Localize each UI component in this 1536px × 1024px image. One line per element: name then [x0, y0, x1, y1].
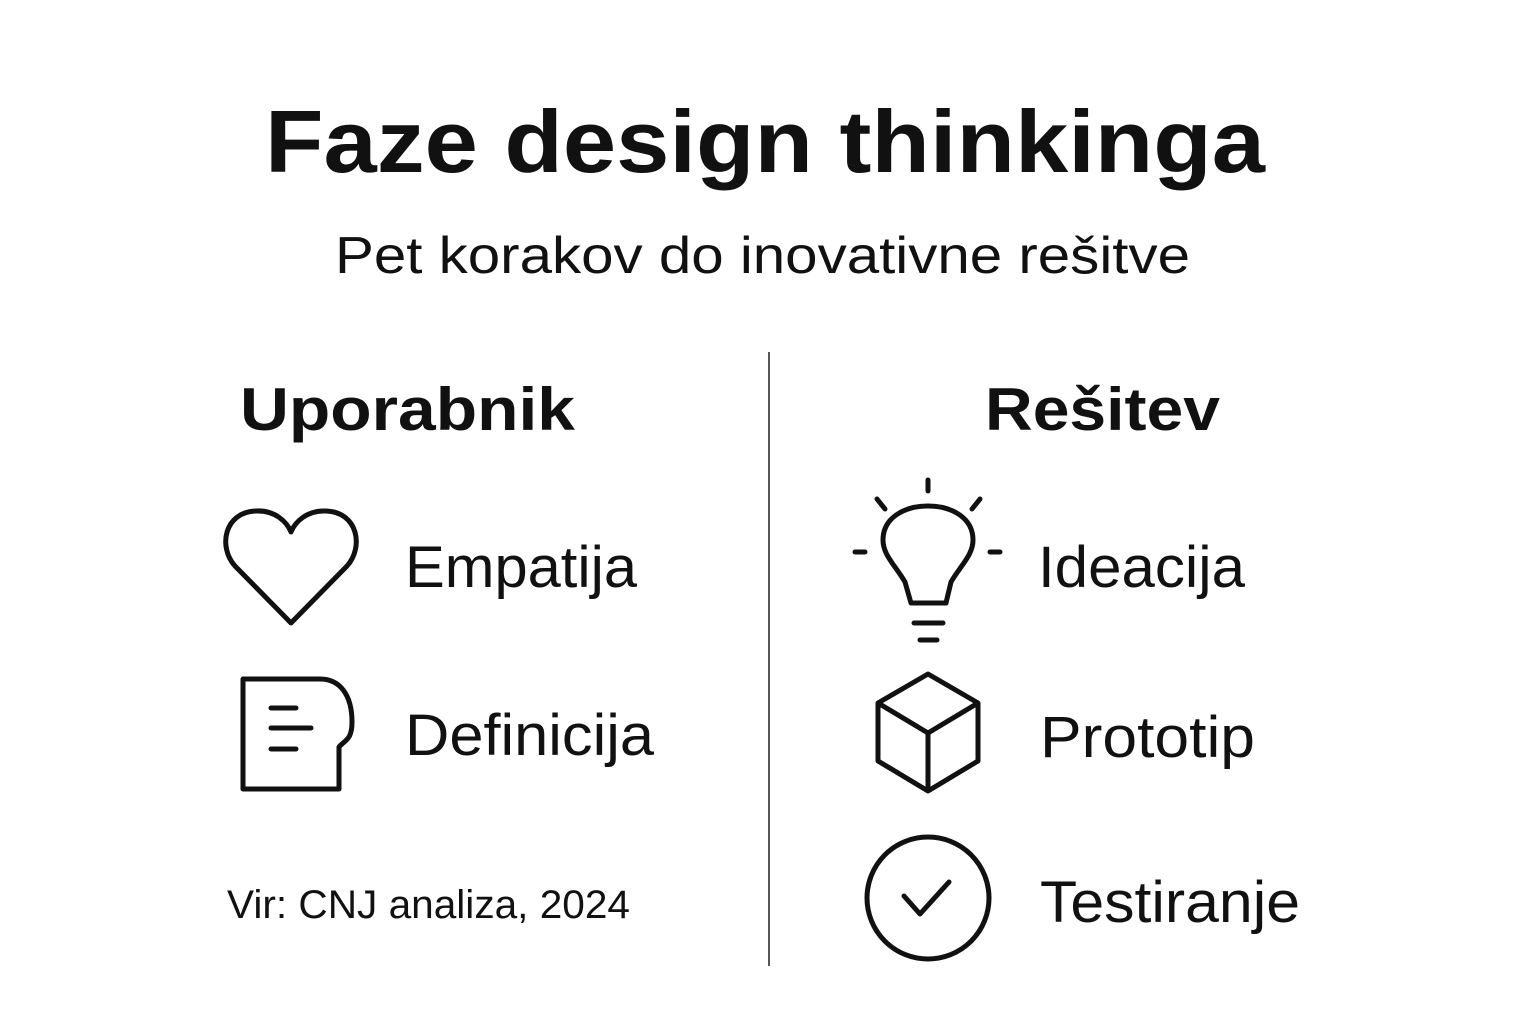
panel: Rešitev	[855, 376, 1300, 959]
icon: document	[243, 679, 352, 789]
icon: cube	[878, 674, 978, 791]
icon: light bulb	[855, 480, 1000, 640]
text: Definicija: Definicija	[405, 703, 655, 768]
text: Testiranje: Testiranje	[1040, 870, 1300, 935]
source note: Vir: CNJ analiza, 2024	[227, 883, 630, 927]
title: Faze design thinkinga	[265, 92, 1266, 191]
icon: check circle	[867, 837, 989, 959]
text: Ideacija: Ideacija	[1038, 535, 1246, 600]
heading: Uporabnik: Uporabnik	[240, 376, 576, 443]
subtitle: Pet korakov do inovativne rešitve	[335, 227, 1190, 285]
text: Empatija: Empatija	[405, 535, 638, 600]
icon: heart	[226, 511, 356, 623]
heading: Rešitev: Rešitev	[985, 376, 1221, 443]
panel: Uporabnik	[226, 376, 655, 927]
text: Prototip: Prototip	[1040, 705, 1255, 770]
